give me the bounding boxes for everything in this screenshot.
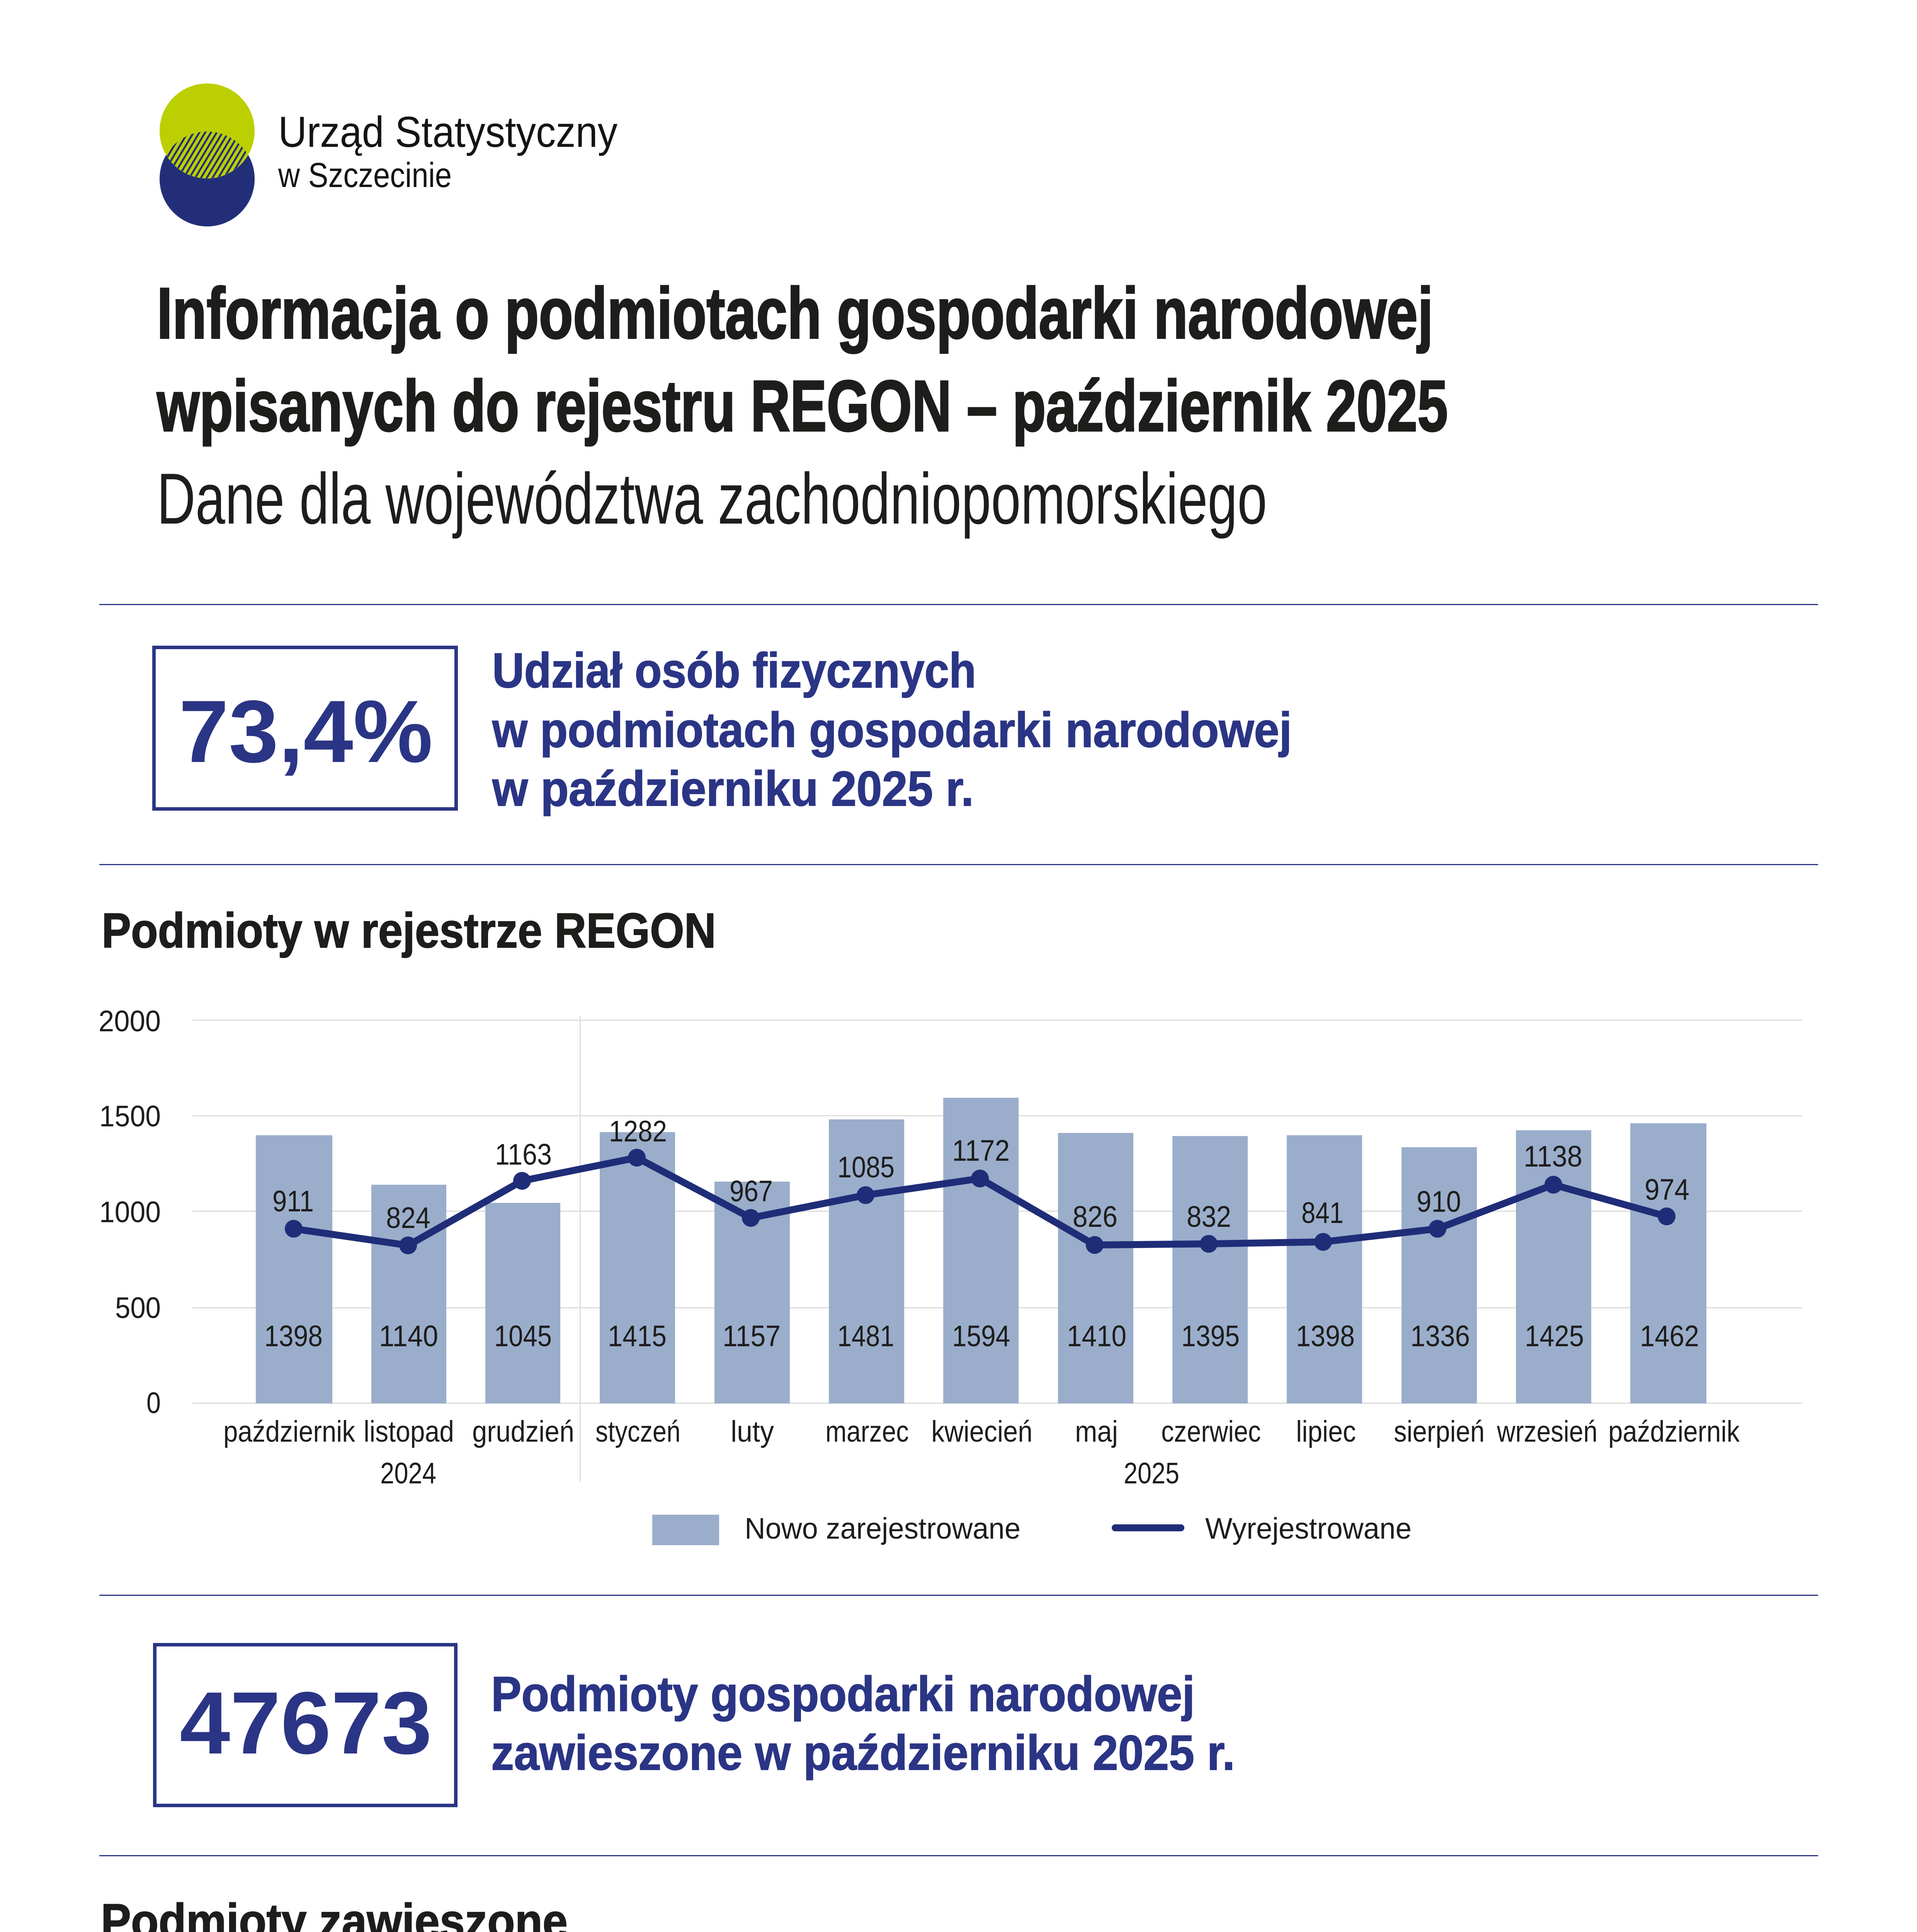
x axis labels: maj: [1075, 1415, 1118, 1448]
line value labels: 974: [1645, 1173, 1689, 1206]
title: Informacja o podmiotach gospodarki narodowej: [157, 273, 1433, 354]
title: [156, 273, 1448, 446]
line value labels: 1138: [1524, 1140, 1582, 1173]
line value labels: 967: [730, 1175, 773, 1208]
y axis labels: 1000: [99, 1196, 161, 1229]
bars: newly registered: [256, 1098, 1706, 1403]
x axis labels: październik: [223, 1415, 355, 1448]
x axis labels: styczeń: [595, 1415, 680, 1448]
x axis labels: 2025: [1124, 1457, 1179, 1490]
callout: share of natural persons: w październiku 2025 r.: [492, 761, 974, 816]
subtitle: Dane dla województwa zachodniopomorskiego: [157, 458, 1267, 539]
line value labels: 824: [386, 1201, 430, 1235]
bar value labels: 1410: [1067, 1320, 1126, 1353]
title: wpisanych do rejestru REGON – październik 2025: [156, 366, 1448, 446]
line value labels: 1085: [837, 1151, 895, 1184]
line: deregistered: [285, 1149, 1675, 1254]
line value labels: 826: [1073, 1200, 1118, 1233]
x axis labels: grudzień: [472, 1415, 574, 1448]
x axis labels: luty: [731, 1415, 774, 1448]
callout: suspended entities: zawieszone w październiku 2025 r.: [491, 1725, 1235, 1780]
x axis labels: marzec: [825, 1415, 909, 1448]
x axis labels: czerwiec: [1161, 1415, 1261, 1448]
line value labels: 841: [1301, 1196, 1344, 1230]
callout: share of natural persons: w podmiotach gospodarki narodowej: [492, 702, 1292, 757]
bar value labels: 1398: [264, 1320, 323, 1353]
bar value labels: 1140: [379, 1320, 438, 1353]
bar value labels: 1398: [1296, 1320, 1355, 1353]
line value labels: 1172: [952, 1134, 1010, 1167]
callout: share of natural persons: Udział osób fizycznych: [492, 643, 976, 698]
bar value labels: 1157: [723, 1320, 781, 1353]
bar value labels: 1336: [1410, 1320, 1470, 1353]
legend: Wyrejestrowane: [1205, 1512, 1412, 1545]
line value labels: 910: [1417, 1185, 1461, 1218]
callout: suspended entities: Podmioty gospodarki narodowej: [491, 1667, 1195, 1721]
line value labels: [272, 1115, 1689, 1235]
bar value labels: 1425: [1525, 1320, 1584, 1353]
line value labels: 911: [272, 1185, 314, 1218]
x axis labels: [223, 1415, 1740, 1490]
bar value labels: 1415: [608, 1320, 667, 1353]
chart: entities in the REGON register: [99, 1005, 1802, 1545]
x axis labels: kwiecień: [931, 1415, 1032, 1448]
legend: Nowo zarejestrowane: [745, 1512, 1021, 1545]
bar value labels: 1395: [1181, 1320, 1240, 1353]
x axis labels: wrzesień: [1497, 1415, 1597, 1448]
logo: Urząd Statystyczny w Szczecinie: Urząd Statystyczny: [278, 108, 617, 156]
y axis labels: 2000: [99, 1005, 161, 1038]
callout: share of natural persons: [154, 643, 1292, 816]
x axis labels: listopad: [364, 1415, 454, 1448]
line value labels: 1163: [495, 1138, 552, 1171]
y axis labels: 500: [115, 1291, 161, 1325]
x axis labels: lipiec: [1296, 1415, 1356, 1448]
callout: share of natural persons: 73,4%: [179, 682, 433, 781]
bar value labels: 1462: [1640, 1320, 1699, 1353]
line value labels: 832: [1187, 1200, 1231, 1233]
y axis labels: 1500: [99, 1100, 161, 1133]
bar value labels: [264, 1320, 1699, 1353]
logo: Urząd Statystyczny w Szczecinie: w Szczecinie: [278, 156, 452, 195]
x axis labels: październik: [1608, 1415, 1740, 1448]
logo: Urząd Statystyczny w Szczecinie: [158, 83, 617, 226]
callout: suspended entities: [155, 1645, 1235, 1805]
y axis labels: 0: [146, 1386, 161, 1420]
legend: [652, 1512, 1412, 1545]
bar value labels: 1045: [494, 1320, 552, 1353]
heading: REGON register: Podmioty w rejestrze REGON: [102, 903, 716, 958]
x axis labels: sierpień: [1394, 1415, 1485, 1448]
callout: suspended entities: 47673: [180, 1673, 432, 1772]
bar value labels: 1481: [837, 1320, 894, 1353]
x axis labels: 2024: [380, 1457, 436, 1490]
bar value labels: 1594: [952, 1320, 1010, 1353]
line value labels: 1282: [609, 1115, 667, 1148]
y axis labels: [99, 1005, 161, 1420]
